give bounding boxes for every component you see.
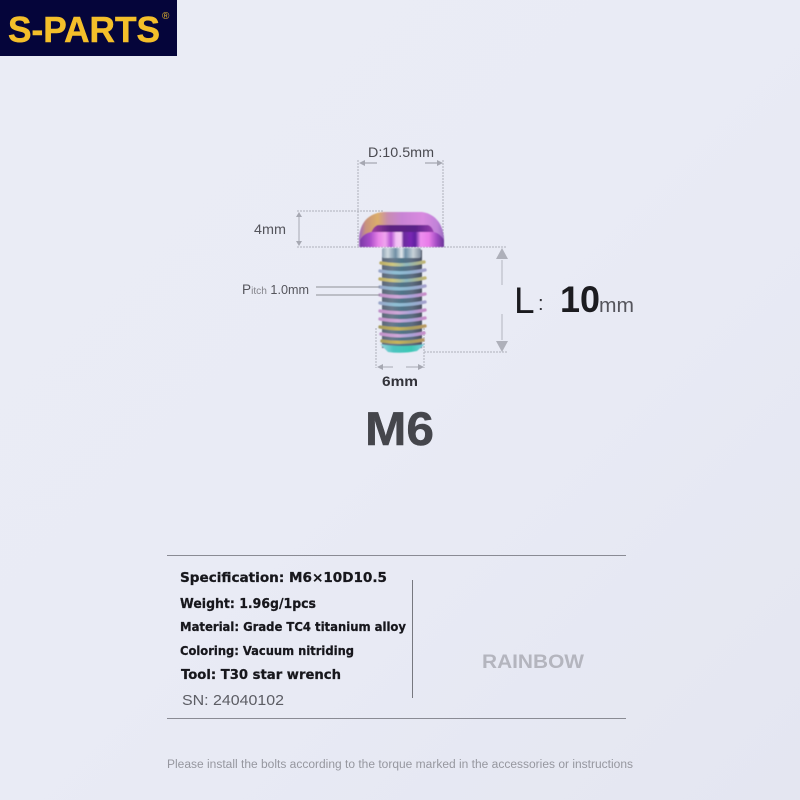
tool: Tool: T30 star wrench: [181, 667, 341, 683]
length label: 10: [560, 279, 600, 320]
bolt shank: [382, 250, 422, 348]
bolt: [359, 212, 444, 353]
length label: [514, 279, 634, 321]
bolt head stripes: [360, 232, 444, 247]
logo: S-PARTS: S-PARTS: [8, 9, 160, 50]
dimension lines: [297, 160, 507, 368]
specification: Specification: M6×10D10.5: [180, 571, 387, 586]
dimension: pitch: Pitch 1.0mm: [242, 281, 309, 297]
spec panel: [167, 556, 626, 718]
model heading: M6: [365, 402, 434, 455]
dimension: thread diameter: [377, 364, 424, 389]
serial number: SN: 24040102: [182, 692, 284, 709]
bolt head: [359, 212, 444, 247]
bolt tip: [380, 344, 425, 353]
dimension: thread diameter: 6mm: [382, 374, 418, 389]
length label: :: [538, 293, 544, 315]
bolt threads: [380, 262, 425, 342]
logo: S-PARTS: [0, 0, 177, 56]
dimension: head height: [254, 212, 302, 246]
dimension: head height: 4mm: [254, 221, 286, 237]
bolt head dark band: [371, 225, 434, 233]
color name: RAINBOW: [482, 652, 584, 673]
logo: S-PARTS: ®: [162, 11, 170, 22]
dimension: head diameter: [359, 144, 443, 166]
coloring: Coloring: Vacuum nitriding: [180, 644, 354, 658]
bolt neck: [382, 248, 421, 258]
weight: Weight: 1.96g/1pcs: [180, 597, 316, 612]
dimension: pitch: [242, 281, 380, 297]
dimension: length arrow: [496, 248, 508, 352]
length label: L: [514, 280, 535, 321]
dimension: head diameter: D:10.5mm: [368, 144, 434, 160]
length label: mm: [599, 295, 634, 317]
material: Material: Grade TC4 titanium alloy: [180, 620, 406, 634]
footer note: Please install the bolts according to the torque marked in the accessories or instructions: [167, 759, 633, 771]
